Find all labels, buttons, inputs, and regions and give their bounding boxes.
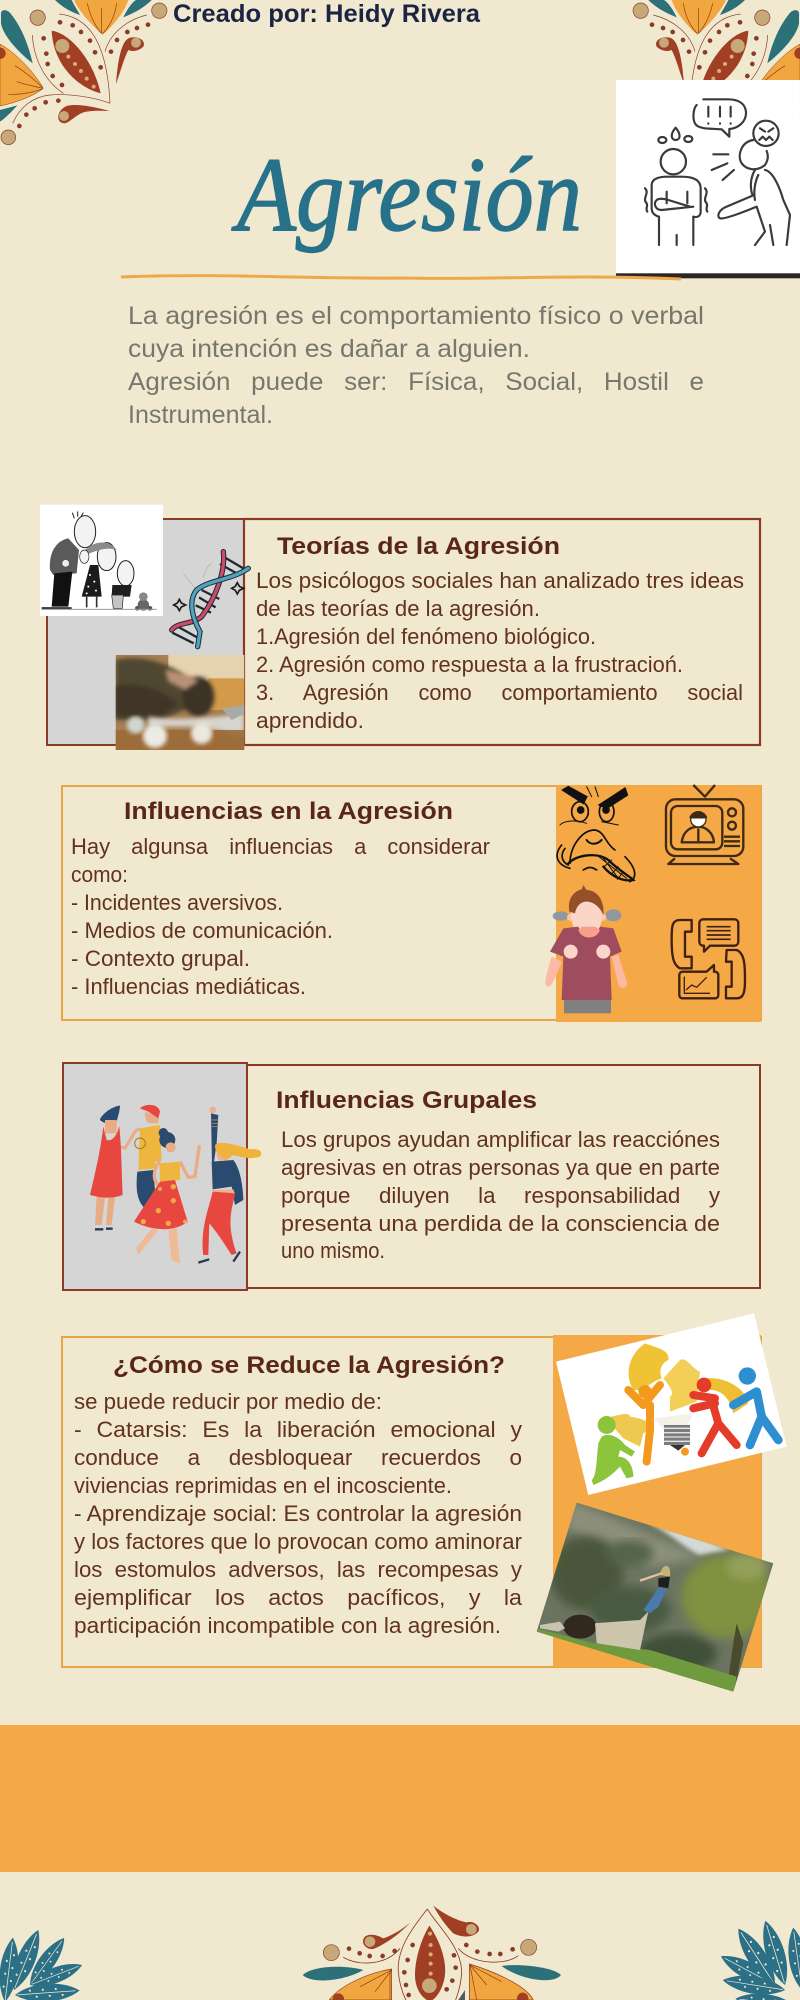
panel body text: presenta una perdida de la consciencia de xyxy=(281,1211,720,1236)
intro text: Instrumental. xyxy=(128,401,273,429)
title: Agresión xyxy=(232,136,582,253)
panel body text: Hay algunsa influencias a considerar xyxy=(71,834,490,859)
panel: ¿Cómo se Reduce la Agresión? xyxy=(62,1313,787,1697)
ornament: top right xyxy=(633,0,800,145)
panel body text xyxy=(281,1127,720,1263)
panel body text: Los psicólogos sociales han analizado tres ideas xyxy=(256,568,744,593)
panel box xyxy=(62,786,761,1020)
panel heading: Teorías de la Agresión xyxy=(277,533,560,560)
orange image column xyxy=(553,1335,761,1667)
panel body text: ejemplificar los actos pacíficos, y la xyxy=(74,1585,523,1610)
panel body text: - Influencias mediáticas. xyxy=(71,974,306,999)
panel heading: Influencias Grupales xyxy=(276,1087,537,1114)
panel body text xyxy=(256,568,744,733)
illustration: group of people xyxy=(90,1105,261,1263)
panel body text: uno mismo. xyxy=(281,1238,385,1263)
icon: DNA helix xyxy=(172,552,248,647)
panel body text xyxy=(71,834,490,999)
panel: Influencias en la Agresión xyxy=(62,785,761,1022)
icon: phones and chat xyxy=(672,919,745,998)
orange image column xyxy=(556,785,761,1022)
panel body text: porque diluyen la responsabilidad y xyxy=(281,1183,720,1208)
panel body text: conduce a desbloquear recuerdos o xyxy=(74,1445,522,1470)
panel body text: y los factores que lo provocan como aminorar xyxy=(74,1529,522,1554)
photo: woman jumping in landscape xyxy=(536,1502,774,1692)
panel body text: agresivas en otras personas ya que en parte xyxy=(281,1155,720,1180)
panel body text: 2. Agresión como respuesta a la frustracioń. xyxy=(256,652,683,677)
icon: television xyxy=(666,785,743,864)
panel body text xyxy=(74,1389,523,1638)
intro text: La agresión es el comportamiento físico o verbal xyxy=(128,302,704,330)
author credit: Creado por: Heidy Rivera xyxy=(173,0,481,28)
grey image area xyxy=(63,1063,247,1290)
panel body text: - Catarsis: Es la liberación emocional y xyxy=(74,1417,522,1442)
photo: aggression line icon xyxy=(616,80,800,278)
panel: Teorías de la Agresión xyxy=(40,505,760,750)
divider line under title xyxy=(121,276,681,279)
panel body text: como: xyxy=(71,862,128,887)
photo: arguing family cartoon xyxy=(40,505,163,616)
panel body text: participación incompatible con la agresión. xyxy=(74,1613,501,1638)
panel body text: - Medios de comunicación. xyxy=(71,918,333,943)
ornament: bottom centre xyxy=(303,1906,561,2000)
panel heading: ¿Cómo se Reduce la Agresión? xyxy=(113,1352,505,1379)
figure: angry man xyxy=(545,885,627,1013)
ornament: top left xyxy=(0,0,167,145)
panel body text: se puede reducir por medio de: xyxy=(74,1389,382,1414)
photo: person resting on desk xyxy=(116,655,244,750)
panel body text: - Incidentes aversivos. xyxy=(71,890,283,915)
intro text: Agresión puede ser: Física, Social, Hostil e xyxy=(128,368,704,396)
panel box xyxy=(62,1337,761,1667)
panel body text: viviencias reprimidas en el incosciente. xyxy=(74,1473,452,1498)
panel heading: Influencias en la Agresión xyxy=(124,798,453,825)
photo: team with puzzle lightbulb xyxy=(556,1313,787,1495)
text box border xyxy=(244,519,760,745)
panel body text: - Contexto grupal. xyxy=(71,946,250,971)
panel: Influencias Grupales xyxy=(63,1063,760,1290)
ornament: bottom left leaves xyxy=(0,1927,85,2000)
intro text xyxy=(128,302,704,429)
grey image area xyxy=(47,519,244,745)
text box border xyxy=(247,1065,760,1288)
orange footer band xyxy=(0,1725,800,1872)
panel body text: los estomulos adversos, las recompesas y xyxy=(74,1557,522,1582)
panel body text: de las teorías de la agresión. xyxy=(256,596,540,621)
icon: angry face xyxy=(557,787,635,882)
panel body text: 1.Agresión del fenómeno biológico. xyxy=(256,624,596,649)
panel body text: 3. Agresión como comportamiento social xyxy=(256,680,743,705)
panel body text: aprendido. xyxy=(256,708,364,733)
ornament: bottom right leaves xyxy=(717,1918,800,2000)
panel body text: - Aprendizaje social: Es controlar la agresión xyxy=(74,1501,522,1526)
intro text: cuya intención es dañar a alguien. xyxy=(128,335,530,363)
panel body text: Los grupos ayudan amplificar las reacciónes xyxy=(281,1127,720,1152)
